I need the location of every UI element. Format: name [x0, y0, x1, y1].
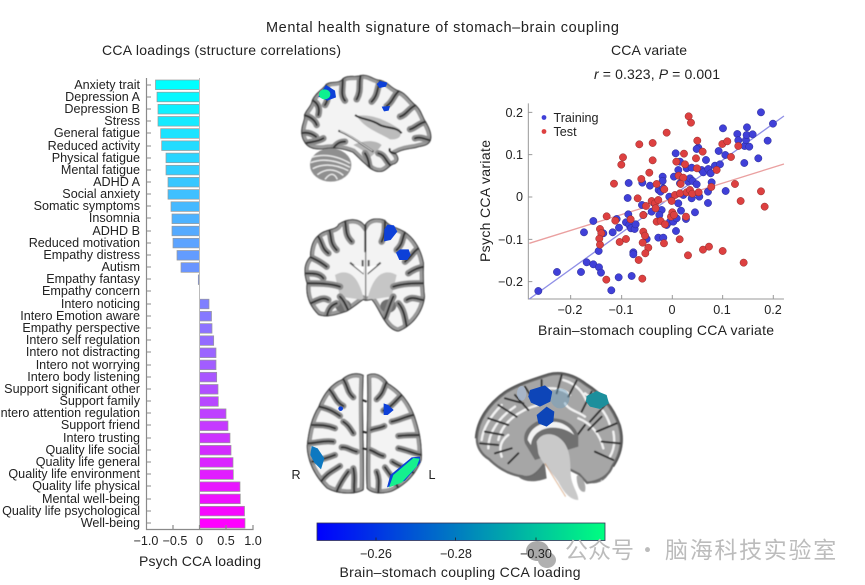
colour bar ticks	[376, 538, 536, 540]
bar chart labels: Reduced activity	[48, 139, 141, 153]
bar chart labels: Quality life social	[46, 443, 140, 457]
bar chart labels: Quality life psychological	[2, 504, 140, 518]
bar chart: psych CCA loading	[0, 78, 262, 569]
bar chart tick labels: −1.0	[134, 534, 158, 548]
title: Mental health signature of stomach–brain coupling	[266, 20, 619, 36]
bar chart labels: Intero self regulation	[26, 333, 140, 347]
scatter axis tick labels: 0.2	[505, 106, 523, 120]
heading: CCA loadings: CCA loadings (structure correlations)	[102, 42, 341, 58]
bar chart labels: Stress	[104, 114, 140, 128]
watermark text: 公众号	[565, 531, 634, 565]
bar chart labels: Intero trusting	[63, 431, 140, 445]
scatter axis tick labels: −0.1	[609, 303, 633, 317]
scatter legend	[542, 111, 599, 139]
colour bar tick labels: −0.30	[520, 547, 552, 561]
brain: 3D medial view	[476, 373, 622, 500]
bar chart labels: Empathy concern	[42, 284, 140, 298]
brain: sagittal slice	[301, 75, 431, 182]
bars	[156, 80, 245, 528]
bar chart labels: Reduced motivation	[29, 236, 140, 250]
activation: axial slice	[310, 403, 420, 487]
bar chart labels: Support family	[60, 394, 141, 408]
bar chart labels: General fatigue	[54, 126, 140, 140]
bar chart labels: Intero not distracting	[26, 345, 140, 359]
brain: axial slice	[307, 373, 422, 494]
activation: 3D medial view	[517, 385, 609, 427]
bar chart axes	[146, 78, 253, 530]
scatter plot	[477, 103, 784, 338]
orientation label R: R	[291, 468, 301, 482]
scatter axis tick labels: 0.1	[505, 148, 523, 162]
training points	[535, 109, 777, 295]
watermark text: 脑海科技实验室	[665, 531, 838, 565]
bar chart labels: ADHD B	[92, 224, 140, 238]
bar chart labels: Physical fatigue	[52, 151, 140, 165]
watermark text: ·	[636, 531, 659, 565]
scatter axis tick labels: 0.1	[713, 303, 731, 317]
bar chart labels: Quality life environment	[8, 467, 140, 481]
bar chart tick labels: −0.5	[163, 534, 187, 548]
bar chart tick labels: 0.5	[217, 534, 235, 548]
bar chart labels: Intero body listening	[27, 370, 140, 384]
bar chart labels: Mental fatigue	[61, 163, 140, 177]
test regression line	[529, 164, 784, 243]
training regression line	[529, 116, 784, 299]
scatter y-axis title: Psych CCA variate	[477, 140, 493, 262]
scatter axis tick labels: −0.2	[558, 303, 582, 317]
bar chart labels: Social anxiety	[62, 187, 141, 201]
colour bar tick labels: −0.26	[360, 547, 392, 561]
colour bar legend	[317, 523, 605, 580]
scatter axes	[528, 103, 784, 299]
colour bar	[317, 523, 605, 540]
test points	[596, 113, 768, 283]
bar chart labels: Empathy perspective	[22, 321, 140, 335]
bar chart labels	[0, 78, 141, 530]
scatter legend: Test	[554, 125, 577, 139]
bar chart x-axis title: Psych CCA loading	[139, 553, 261, 569]
bar chart tick labels	[134, 534, 262, 548]
bar chart labels: Empathy fantasy	[46, 272, 141, 286]
scatter x-axis title: Brain–stomach coupling CCA variate	[538, 322, 774, 338]
bar chart labels: Empathy distress	[43, 248, 140, 262]
bar chart tick labels: 0	[196, 534, 203, 548]
bar chart labels: Support friend	[61, 418, 140, 432]
activation: coronal slice	[384, 225, 411, 260]
bar chart labels: Intero not worrying	[36, 358, 140, 372]
bar chart labels: Insomnia	[89, 211, 140, 225]
colour bar title: Brain–stomach coupling CCA loading	[340, 564, 580, 580]
bar chart labels: Autism	[102, 260, 140, 274]
bar chart labels: Intero Emotion aware	[20, 309, 140, 323]
scatter axis tick labels: 0	[516, 190, 523, 204]
scatter axis tick labels: 0.2	[764, 303, 782, 317]
bar chart labels: Quality life physical	[32, 479, 140, 493]
bar chart labels: Depression B	[64, 102, 140, 116]
scatter axis tick labels: −0.2	[498, 275, 523, 289]
bar chart labels: Intero noticing	[61, 297, 140, 311]
activation: sagittal slice	[318, 81, 390, 111]
bar chart labels: Somatic symptoms	[34, 199, 140, 213]
bar chart labels: Anxiety trait	[74, 78, 140, 92]
scatter legend: Training	[554, 111, 599, 125]
watermark icon: chat bubbles	[526, 541, 556, 568]
bar chart labels: Quality life general	[36, 455, 140, 469]
bar chart labels: Support significant other	[4, 382, 140, 396]
orientation label L: L	[428, 468, 436, 482]
bar chart labels: Mental well-being	[42, 492, 140, 506]
bar chart labels: Depression A	[65, 90, 141, 104]
colour bar tick labels	[360, 547, 552, 561]
heading: CCA variate: CCA variate	[611, 42, 687, 58]
scatter axis tick labels	[498, 106, 782, 317]
scatter axis tick labels: −0.1	[498, 233, 523, 247]
statistics: r = 0.323, P = 0.001	[594, 66, 720, 82]
brain: coronal slice	[304, 218, 425, 332]
bar chart labels: Well-being	[81, 516, 140, 530]
bar chart labels: Intero attention regulation	[0, 406, 140, 420]
bar chart tick labels: 1.0	[244, 534, 262, 548]
scatter axis tick labels: 0	[668, 303, 676, 317]
colour bar tick labels: −0.28	[440, 547, 472, 561]
bar chart labels: ADHD A	[93, 175, 141, 189]
